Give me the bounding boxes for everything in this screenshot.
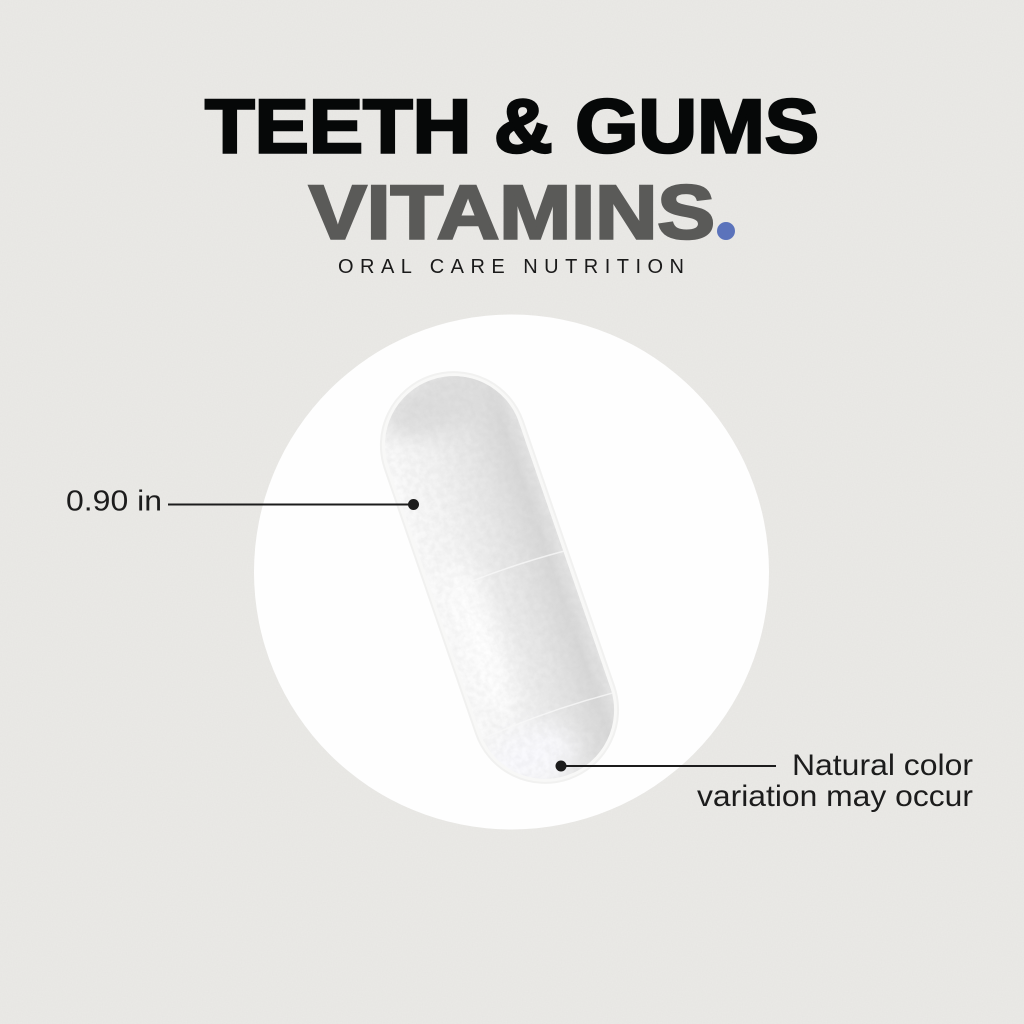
callout: size bbox=[66, 486, 419, 518]
subtitle: ORAL CARE NUTRITION bbox=[338, 256, 684, 278]
label: 0.90 in: 0.90 in bbox=[66, 486, 162, 518]
note text bbox=[697, 749, 973, 813]
capsule bbox=[380, 371, 619, 784]
leader line bbox=[168, 504, 412, 506]
leader line bbox=[561, 765, 776, 767]
panel: white circle bbox=[254, 314, 769, 830]
dot bbox=[556, 760, 566, 772]
title bbox=[205, 84, 819, 278]
dot bbox=[408, 499, 419, 510]
heading: vitamins: VITAMINS bbox=[309, 170, 715, 256]
note text: variation may occur bbox=[697, 780, 973, 813]
note text: Natural color bbox=[792, 749, 973, 782]
callout: color variation bbox=[556, 749, 973, 813]
heading: teeth and gums: TEETH & GUMS bbox=[205, 84, 819, 170]
